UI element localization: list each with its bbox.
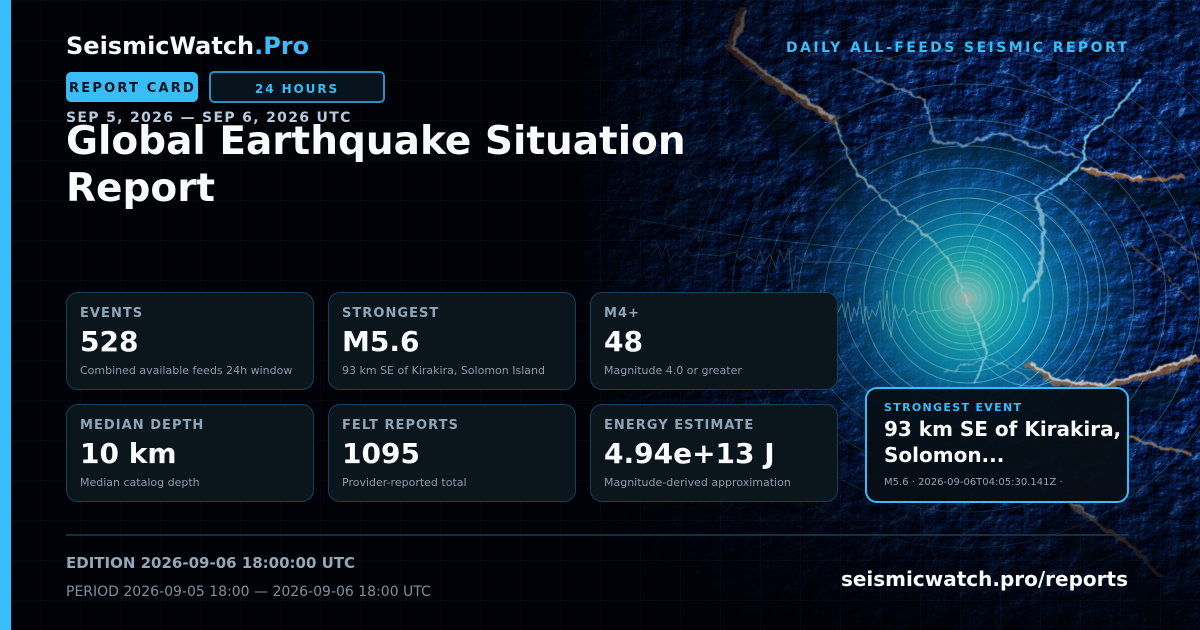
stat card: strongest: M5.6	[342, 325, 419, 358]
stat card: events: 528	[80, 325, 138, 358]
stat card: strongest: 93 km SE of Kirakira, Solomon Island	[342, 364, 545, 377]
stat card: energy estimate: Magnitude-derived approximation	[604, 476, 791, 489]
dark shadow bands	[730, 70, 1200, 610]
stat card: median depth: Median catalog depth	[80, 476, 200, 489]
stat card: felt reports: 1095	[342, 437, 420, 470]
stat card: events	[66, 292, 314, 390]
edition line: EDITION 2026-09-06 18:00:00 UTC	[66, 554, 355, 572]
stat card: events: Combined available feeds 24h window	[80, 364, 292, 377]
stat card: strongest	[328, 292, 576, 390]
stat card: M4+: M4+	[604, 306, 640, 321]
stat card: energy estimate: ENERGY ESTIMATE	[604, 418, 754, 433]
stat card: M4+	[590, 292, 838, 390]
callout: strongest event: Solomon...	[884, 443, 1004, 467]
badge: report card	[67, 72, 198, 102]
period line: PERIOD 2026-09-05 18:00 — 2026-09-06 18:00 UTC	[66, 584, 431, 600]
stat card: energy estimate: 4.94e+13 J	[604, 437, 775, 470]
header tagline: DAILY ALL-FEEDS SEISMIC REPORT	[786, 40, 1130, 56]
date range: SEP 5, 2026 — SEP 6, 2026 UTC	[66, 110, 352, 126]
stat card: energy estimate	[590, 404, 838, 502]
title: Global Earthquake Situation	[66, 119, 686, 164]
badge: 24 hours	[209, 71, 385, 103]
callout: strongest event	[865, 387, 1129, 503]
footer url: seismicwatch.pro/reports	[841, 567, 1128, 591]
stat card: median depth: MEDIAN DEPTH	[80, 418, 204, 433]
epicenter rings	[651, 8, 1200, 588]
callout: strongest event: M5.6 · 2026-09-06T04:05:30.141Z ·	[884, 477, 1063, 488]
stat card: M4+: Magnitude 4.0 or greater	[604, 364, 742, 377]
accent bar	[0, 0, 11, 630]
badge: 24 hours: 24 HOURS	[255, 82, 339, 96]
stat card: M4+: 48	[604, 325, 643, 358]
seismograph traces	[600, 214, 966, 338]
callout: strongest event: STRONGEST EVENT	[884, 401, 1022, 414]
title	[66, 119, 686, 211]
badge: report card: REPORT CARD	[69, 81, 196, 96]
fault lines	[665, 7, 1200, 577]
callout: strongest event: 93 km SE of Kirakira,	[884, 417, 1121, 441]
footer divider	[66, 534, 1129, 536]
stat card: felt reports: FELT REPORTS	[342, 418, 459, 433]
stat card: median depth: 10 km	[80, 437, 177, 470]
stat card: felt reports	[328, 404, 576, 502]
stat card: strongest: STRONGEST	[342, 306, 439, 321]
stat card: events: EVENTS	[80, 306, 143, 321]
stat card: median depth	[66, 404, 314, 502]
stat card: felt reports: Provider-reported total	[342, 476, 467, 489]
title: Report	[66, 166, 215, 211]
brand logo: SeismicWatch.Pro	[66, 32, 309, 60]
